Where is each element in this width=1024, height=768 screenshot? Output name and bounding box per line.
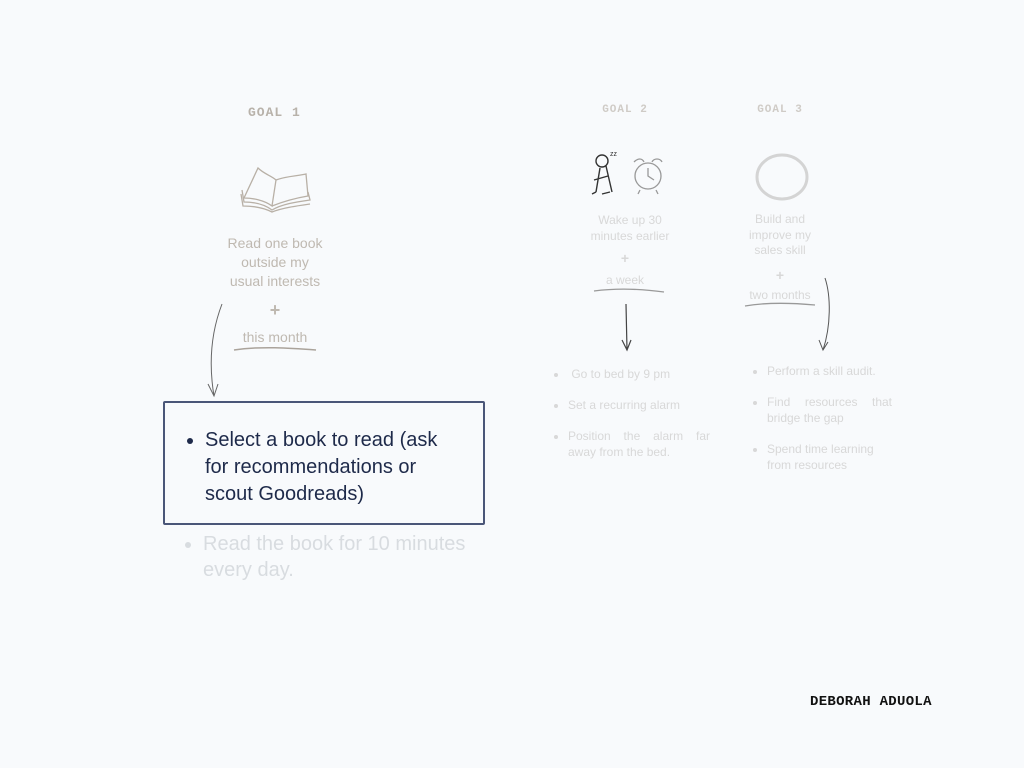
list: goal 2 tasks: Go to bed by 9 pm [571,367,670,381]
signature: DEBORAH ADUOLA [810,694,932,710]
icon: sleeping person and alarm clock: zz [610,151,618,158]
list: goal 3 tasks [753,364,892,472]
list: goal 3 tasks: Perform a skill audit. [767,364,876,378]
text: this month: this month [243,329,307,345]
list: goal 2 tasks: Set a recurring alarm [568,398,680,412]
text: two months: two months [749,288,811,302]
heading: goal 2: GOAL 2 [602,104,648,116]
arrow: goal 3 [818,278,830,351]
icon: sleeping person and alarm clock [592,151,662,195]
plus: + [776,267,784,283]
text: goal 3 description: Build and improve my sales skill [749,212,811,257]
list: goal 2 tasks [554,367,710,459]
text: a week: a week [606,273,644,287]
list: goal 3 tasks: Find resources that bridge the gap [767,395,892,425]
text: goal 2 description: Wake up 30 minutes earlier [591,213,669,243]
plus: + [621,250,629,266]
list: goal 2 tasks: Position the alarm far away from the bed. [568,429,710,459]
text: second task: Read the book for 10 minutes every day. [203,533,465,581]
list: goal 3 tasks: Spend time learning from resources [767,442,874,472]
arrow: goal 2 [622,304,632,352]
plus: + [270,300,280,320]
heading: goal 1: GOAL 1 [248,105,301,120]
icon: open book [240,167,311,213]
box: selected task: Select a book to read (ask for recommendations or scout Goodreads) [205,429,437,505]
box: selected task [163,401,485,525]
text: goal 1 description: Read one book outside my usual interests [228,235,322,289]
heading: goal 3: GOAL 3 [757,104,803,116]
icon: circle [756,154,808,200]
arrow: goal 1 [208,304,222,398]
